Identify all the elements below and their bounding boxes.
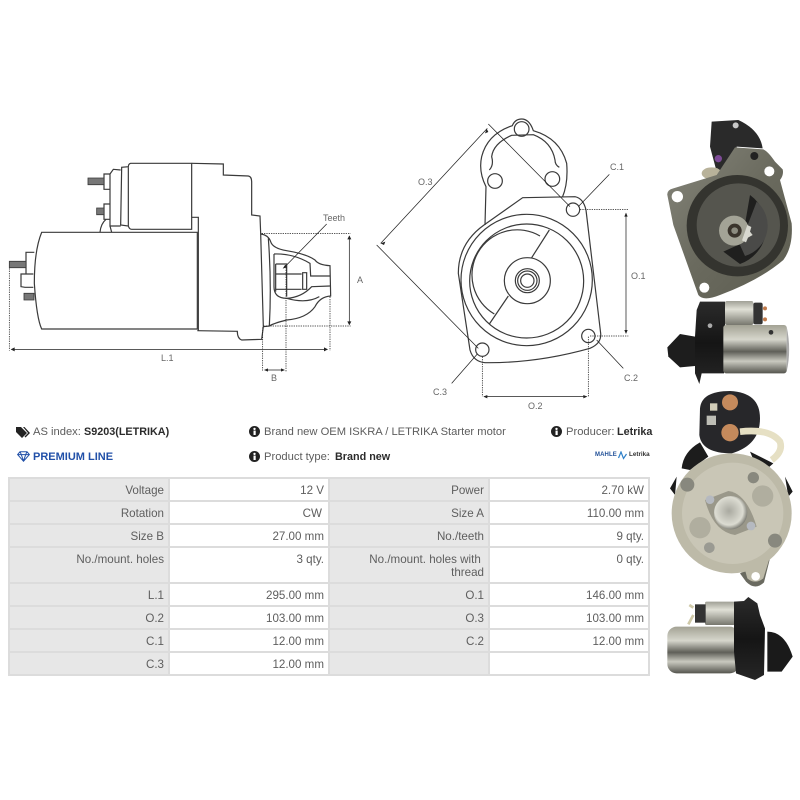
row: mounting holes: thread <box>451 566 484 579</box>
specification table <box>8 477 650 676</box>
row: O.2 and O.3 <box>10 607 644 628</box>
icon: diamond <box>17 451 30 462</box>
dark recess <box>687 175 788 276</box>
cap bolts <box>680 478 694 492</box>
nose <box>767 632 793 672</box>
black housing <box>695 302 725 384</box>
description: Brand new OEM ISKRA / LETRIKA Starter motor <box>264 426 506 438</box>
concentric rings <box>461 214 592 346</box>
mounting flange <box>458 197 601 363</box>
index row: S9203(LETRIKA) <box>84 426 169 438</box>
row: size B and teeth: Size B <box>130 530 164 543</box>
icon: tags <box>16 427 30 438</box>
row: C.3: C.3 <box>146 658 164 671</box>
logo: MAHLE Letrika: MAHLE <box>595 452 617 458</box>
label: O.1: O.1 <box>631 271 646 281</box>
row: size B and teeth <box>10 525 644 546</box>
rear terminals <box>21 252 34 287</box>
label: C.1: C.1 <box>610 162 624 172</box>
icon: info <box>249 426 260 437</box>
row: mounting holes: No./mount. holes <box>76 553 164 566</box>
row: mounting holes: No./mount. holes with <box>369 553 481 566</box>
producer: Producer: <box>566 426 615 438</box>
row: size B and teeth: 9 qty. <box>616 530 644 543</box>
nose <box>667 334 695 367</box>
product type: Product type: <box>264 451 330 463</box>
rear cap <box>740 558 770 587</box>
solenoid terminals <box>104 174 110 219</box>
index row: AS index: <box>33 426 81 438</box>
label: C.2: C.2 <box>624 373 638 383</box>
row: size B and teeth: 27.00 mm <box>272 530 324 543</box>
solenoid <box>705 602 735 625</box>
motor body <box>34 232 197 329</box>
nose cone <box>261 234 331 327</box>
label: A: A <box>357 275 363 285</box>
row: C.3: 12.00 mm <box>272 658 324 671</box>
solenoid back <box>710 120 763 172</box>
row: L.1 and O.1: L.1 <box>148 589 164 602</box>
row: mounting holes: 3 qty. <box>296 553 324 566</box>
row: C.1 and C.2: C.2 <box>466 635 484 648</box>
solenoid <box>725 301 753 325</box>
row: C.1 and C.2: C.1 <box>146 635 164 648</box>
row: voltage and power <box>10 479 644 500</box>
row: C.1 and C.2: 12.00 mm <box>592 635 644 648</box>
lugs <box>752 485 773 507</box>
row: L.1 and O.1: O.1 <box>465 589 484 602</box>
label: B: B <box>271 373 277 383</box>
row: rotation and size A: 110.00 mm <box>587 507 644 520</box>
center dome <box>705 491 757 535</box>
row: rotation and size A: Rotation <box>121 507 164 520</box>
row: O.2 and O.3: 103.00 mm <box>586 612 644 625</box>
row: voltage and power: Voltage <box>125 484 164 497</box>
dimension lines <box>9 233 351 372</box>
mount holes <box>566 203 580 216</box>
solenoid <box>100 163 192 232</box>
logo: MAHLE Letrika <box>595 451 650 460</box>
black housing <box>734 597 765 680</box>
label: Teeth: Teeth <box>323 213 345 223</box>
premium line badge: PREMIUM LINE <box>33 451 113 463</box>
label: O.2: O.2 <box>528 401 543 411</box>
row: C.3 <box>10 653 488 674</box>
drive housing <box>192 163 263 340</box>
row: C.1 and C.2 <box>10 630 644 651</box>
row: rotation and size A: Size A <box>451 507 484 520</box>
row: mounting holes: 0 qty. <box>616 553 644 566</box>
row: voltage and power: 12 V <box>300 484 324 497</box>
row: O.2 and O.3: O.3 <box>465 612 484 625</box>
row: voltage and power: Power <box>451 484 484 497</box>
row: O.2 and O.3: O.2 <box>145 612 164 625</box>
producer <box>551 426 652 438</box>
label: C.3: C.3 <box>433 387 447 397</box>
bracket holes <box>514 122 529 136</box>
index row <box>16 426 169 438</box>
label: L.1: L.1 <box>161 353 174 363</box>
row: O.2 and O.3: 103.00 mm <box>266 612 324 625</box>
producer: Letrika <box>617 426 652 438</box>
product type: Brand new <box>335 451 390 463</box>
logo: MAHLE Letrika: Letrika <box>629 451 650 458</box>
row: mounting holes <box>10 548 644 582</box>
barrel <box>667 627 739 673</box>
hub <box>504 258 550 304</box>
barrel <box>723 325 787 373</box>
row: L.1 and O.1: 146.00 mm <box>586 589 644 602</box>
flange plate <box>667 147 792 298</box>
row: size B and teeth: No./teeth <box>437 530 484 543</box>
row: voltage and power: 2.70 kW <box>601 484 644 497</box>
row: L.1 and O.1: 295.00 mm <box>266 589 324 602</box>
label: O.3: O.3 <box>418 177 433 187</box>
upper bracket <box>481 119 567 225</box>
row: L.1 and O.1 <box>10 584 644 605</box>
dimension lines <box>377 124 626 397</box>
logo wave <box>618 451 627 460</box>
product type <box>249 451 390 463</box>
row: rotation and size A <box>10 502 644 523</box>
bracket behind cap <box>670 442 793 497</box>
row: C.1 and C.2: 12.00 mm <box>272 635 324 648</box>
icon: info <box>249 451 260 462</box>
icon: info <box>551 426 562 437</box>
row: rotation and size A: CW <box>303 507 322 520</box>
solenoid top <box>699 391 760 453</box>
